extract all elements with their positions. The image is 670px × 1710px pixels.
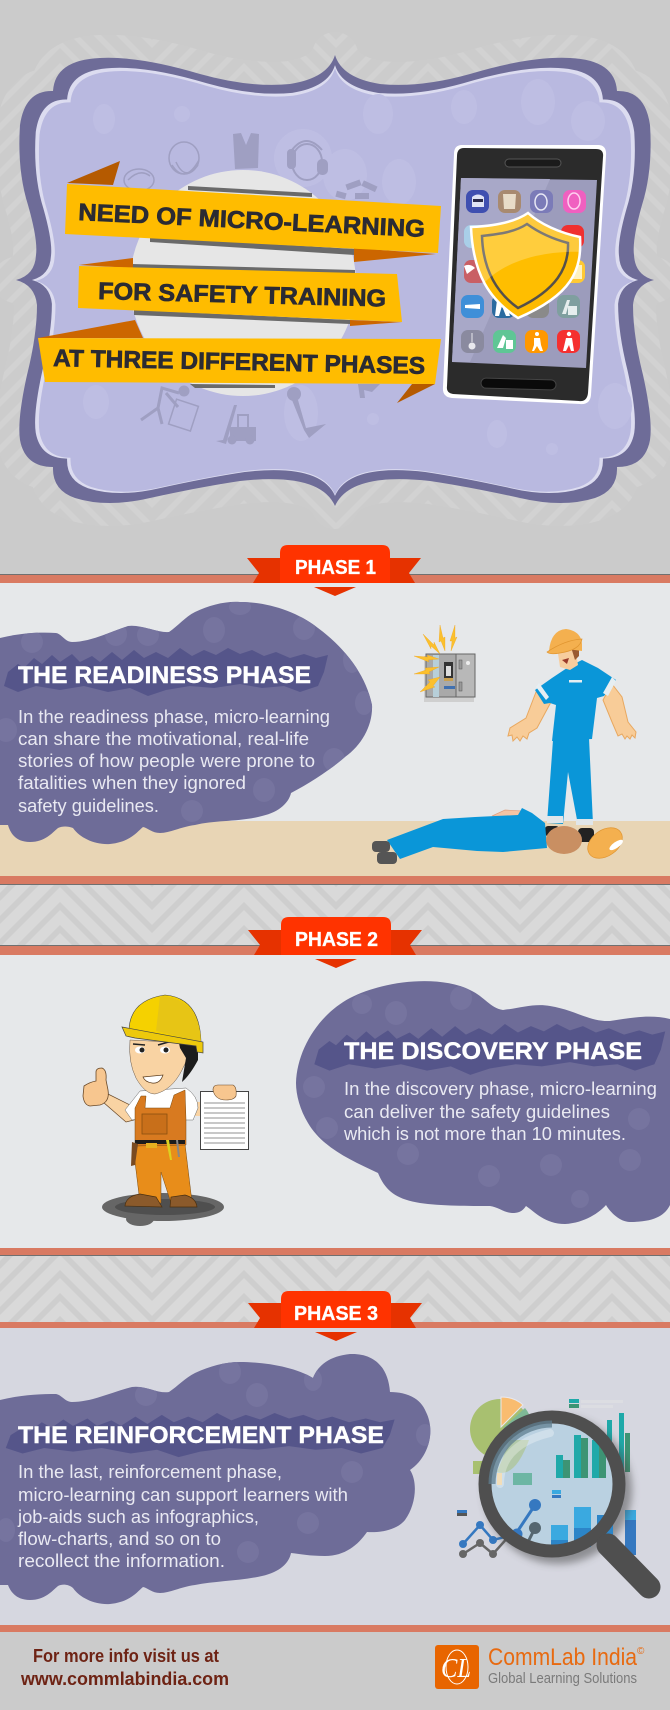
body text: fatalities when they ignored [18,773,246,793]
belt and tools [135,1140,185,1144]
fallen hat [582,821,628,865]
icon: safety vest [233,133,259,169]
trousers [547,738,593,825]
lens glass [482,1414,622,1554]
section 1 band [0,574,670,885]
body text: recollect the information. [18,1551,225,1571]
pie through lens [497,1440,529,1473]
body text: safety guidelines. [18,796,159,816]
head [557,647,578,670]
hat [549,629,582,651]
lens inner shading [492,1424,552,1484]
pink arm [492,810,522,817]
phase 2 tag: PHASE 2 [295,929,378,951]
body text: In the last, reinforcement phase, [18,1462,282,1482]
logo: © [637,1646,645,1657]
head [546,826,582,854]
illustration: thumbs-up worker [83,995,248,1226]
charts through lens [497,1435,613,1547]
body text: In the discovery phase, micro-learning [344,1079,657,1099]
arms [508,692,551,741]
title ribbon 1: NEED OF MICRO-LEARNING [78,199,426,243]
footer text: For more info visit us at [33,1646,219,1666]
icon: hidden face [124,169,154,191]
body text: can deliver the safety guidelines [344,1102,610,1122]
app icons [461,190,586,353]
icon: face with mask [169,142,199,174]
trousers [133,1144,192,1203]
magnifier handle [608,1545,649,1587]
hero section [16,55,654,506]
body text: job-aids such as infographics, [17,1507,259,1527]
shoes [372,841,390,852]
logo: Global Learning Solutions [488,1670,637,1687]
illustration: fallen worker [372,808,628,865]
footer [0,1632,670,1710]
overall bib [135,1090,186,1146]
frame bubbles [83,79,632,455]
ground shadow [102,1193,224,1226]
phone home button [481,378,556,390]
eyes [135,1046,145,1054]
phase 1 tag: PHASE 1 [295,557,376,579]
chevron halo around frame [16,55,654,506]
icon: partial walker [358,384,380,398]
phase 3 tag: PHASE 3 [294,1303,378,1325]
app glyphs [464,193,582,351]
body text [343,1079,657,1144]
illustration: magnifier over charts [457,1397,649,1587]
body text: micro-learning can support learners with [18,1485,348,1505]
title ribbon 3: AT THREE DIFFERENT PHASES [53,345,425,380]
title ribbon 2: FOR SAFETY TRAINING [98,278,386,313]
section 3 band [0,1322,670,1632]
line charts [459,1521,517,1558]
phone body [443,145,606,404]
phase 3 tag [248,1291,422,1341]
body text: can share the motivational, real-life [18,729,309,749]
right forearm [190,1102,201,1116]
logo [435,1644,645,1689]
body text [17,1462,348,1571]
ornate frame [16,55,654,506]
smartphone [443,145,606,404]
panel: discovery phase blob [296,981,670,1224]
title ribbon 2 [78,266,402,322]
shield [471,213,585,318]
body text: which is not more than 10 minutes. [343,1124,626,1144]
pie chart [470,1397,530,1459]
body text [18,707,330,816]
face [130,1040,190,1094]
legend top [569,1399,623,1408]
hair [177,1033,198,1082]
heading: THE READINESS PHASE [18,662,311,689]
hard hat [129,995,201,1042]
footer text: www.commlabindia.com [20,1669,229,1689]
phase 1 tag [247,545,421,596]
illustration: standing worker [508,629,636,842]
faint safety icons [124,133,380,444]
logo: CL [441,1653,471,1683]
body text: flow-charts, and so on to [18,1529,221,1549]
white globe [130,170,356,396]
ribbon shadows [132,186,355,388]
smile [143,1075,163,1083]
ribbon tails [38,161,436,403]
footer text [20,1646,229,1689]
lens shadow [484,1416,632,1564]
chevron gap 2 [0,1256,670,1322]
panel: readiness phase blob [0,599,373,844]
paper [200,1085,248,1150]
shirt [125,1088,198,1120]
title ribbon 1 [65,184,441,253]
fingers [213,1085,236,1100]
chevron gap 1 [0,885,670,945]
illustration: electrical box [414,625,475,702]
body text: In the readiness phase, micro-learning [18,707,330,727]
blue overall [387,808,547,859]
icon: worker bending [141,387,198,431]
icon: lightning bolts [414,625,457,692]
lens glare [500,1433,550,1484]
icon: air horn [287,387,326,438]
body text: stories of how people were prone to [18,751,315,771]
section 2 band [0,945,670,1256]
boots [125,1194,162,1207]
shoes [545,826,559,836]
logo: CommLab India [488,1644,638,1671]
heading: THE DISCOVERY PHASE [344,1038,642,1065]
title brush [4,648,328,696]
thumb arm [103,1094,134,1122]
panel: reinforcement phase blob [0,1354,434,1604]
phone speaker [505,159,561,167]
icon: ear defenders [288,141,327,180]
title brush [314,1024,665,1075]
icon: falling bricks [335,179,378,199]
phone screen [452,178,597,368]
lens ring [485,1417,619,1551]
icon: forklift [216,405,256,444]
outer bars [607,1413,636,1555]
shirt [535,660,616,741]
title ribbon 3 [38,338,441,384]
phase 2 tag [248,917,422,968]
thumb hand [83,1068,108,1106]
title brush [6,1413,395,1457]
heading: THE REINFORCEMENT PHASE [18,1422,384,1449]
small rects [473,1461,483,1474]
legend left [457,1510,467,1516]
